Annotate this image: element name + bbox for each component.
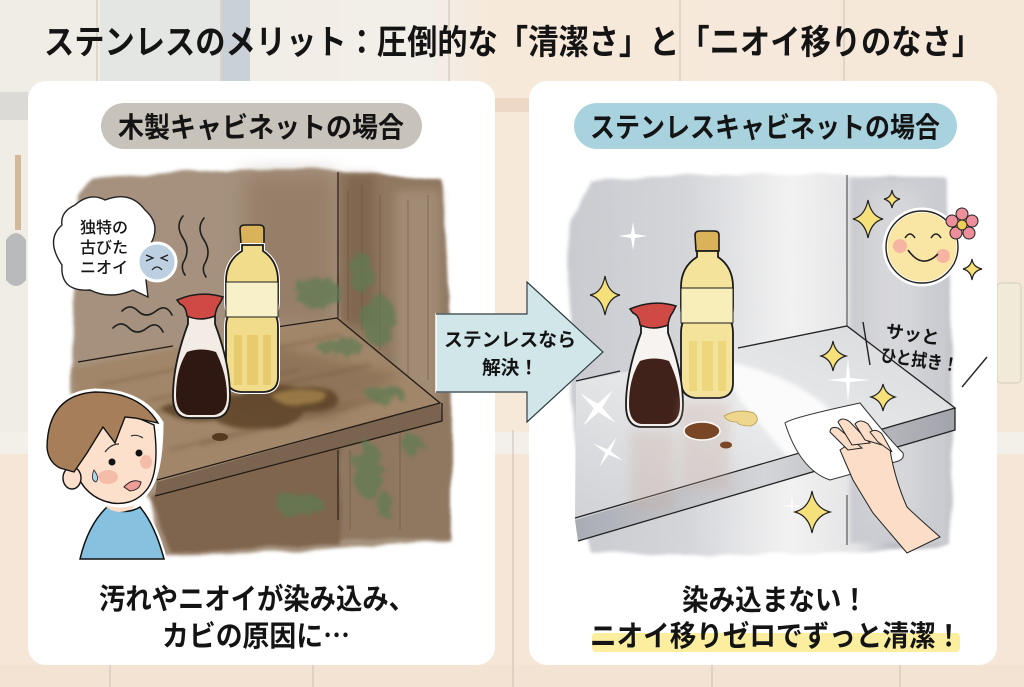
shelf	[72, 318, 442, 496]
caption: stainless cabinet: 染み込まない！	[682, 584, 868, 617]
icon: soy sauce bottle	[173, 294, 230, 418]
reflections	[630, 400, 730, 510]
shelf	[575, 326, 955, 541]
icon: stink face	[138, 243, 176, 281]
panel heading: wooden cabinet: 木製キャビネットの場合	[118, 112, 404, 143]
sparkles	[590, 190, 982, 533]
wipe label	[863, 321, 987, 387]
caption: wooden cabinet: カビの原因に…	[162, 613, 350, 655]
panel: wooden cabinet	[28, 81, 495, 665]
caption: stainless cabinet: ニオイ移りゼロでずっと清潔！	[590, 620, 962, 653]
wipe label: ひと拭き！	[879, 344, 960, 376]
hand	[830, 419, 940, 553]
illustration: clean stainless cabinet	[566, 174, 987, 555]
cloth	[785, 403, 903, 480]
speech bubble: smell: 独特の	[80, 219, 128, 237]
arrow: to stainless: 解決！	[482, 357, 538, 379]
highlight marker	[592, 633, 960, 652]
smell waves	[113, 216, 208, 332]
panel heading: wooden cabinet	[101, 103, 422, 149]
wipe label: サッと	[884, 321, 941, 348]
caption: wooden cabinet	[99, 582, 415, 655]
arrow: to stainless	[436, 282, 603, 422]
arrow: to stainless: ステンレスなら	[444, 329, 576, 351]
icon: oil bottle	[681, 231, 733, 398]
speech bubble: smell: 古びた	[80, 239, 128, 257]
speech bubble: smell	[54, 197, 155, 297]
icon: soy sauce bottle	[626, 303, 683, 427]
panel: stainless cabinet	[529, 81, 997, 665]
icon: oil bottle	[226, 225, 278, 392]
speech bubble: smell: ニオイ	[80, 260, 128, 277]
caption: stainless cabinet	[590, 584, 962, 653]
character: worried child	[47, 392, 164, 559]
panel heading: stainless cabinet: ステンレスキャビネットの場合	[590, 112, 940, 143]
illustration: moldy wooden cabinet	[47, 169, 450, 559]
panel heading: stainless cabinet	[574, 103, 957, 149]
spilled stain	[160, 385, 338, 441]
mold stains	[276, 252, 422, 518]
icon: smiling face with flower	[885, 208, 978, 284]
drips	[684, 411, 757, 448]
caption: wooden cabinet: 汚れやニオイが染み込み、	[99, 582, 415, 616]
